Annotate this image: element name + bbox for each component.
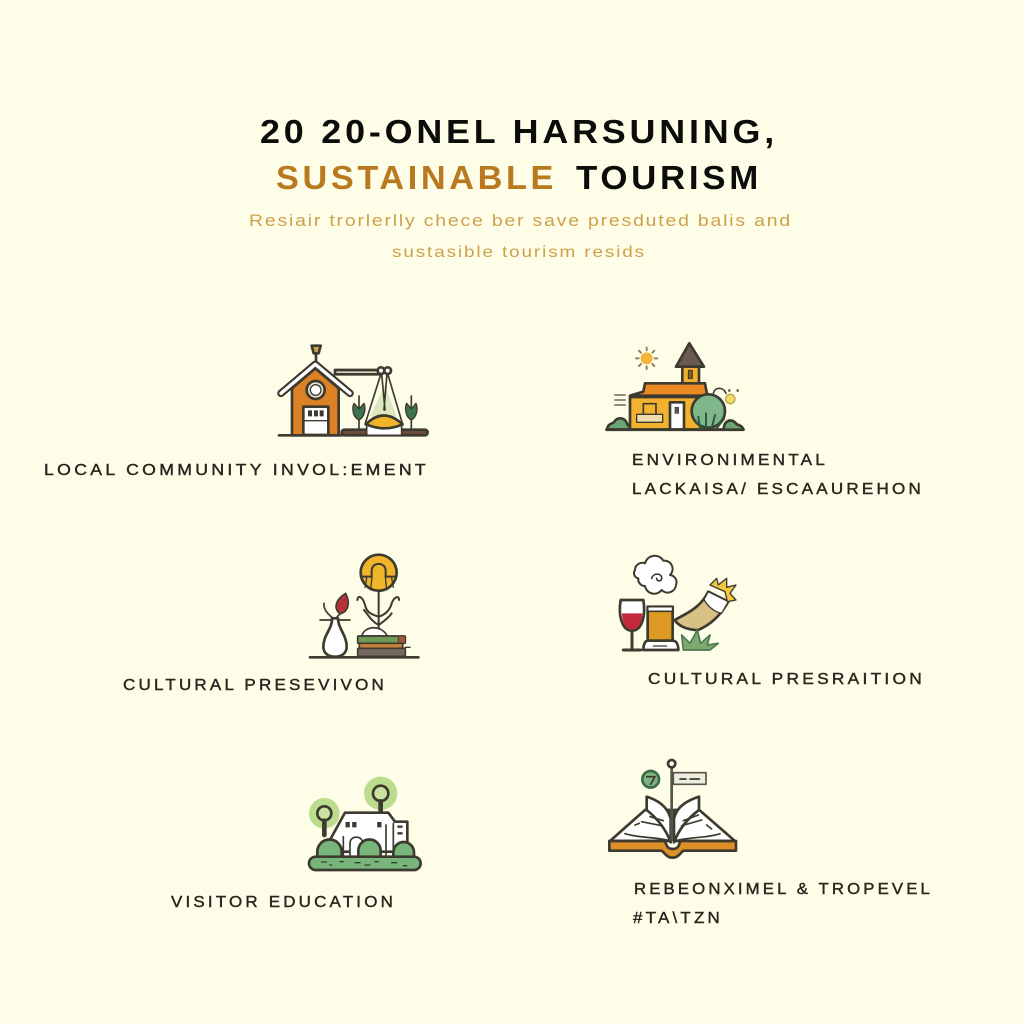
label: local community involvement: LOCAL COMMUNITY INVOL:EMENT <box>44 462 429 479</box>
label: environmental: LACKAISA/ ESCAAUREHON <box>632 481 924 498</box>
label: visitor education: VISITOR EDUCATION <box>171 894 396 911</box>
label: cultural preservation left: CULTURAL PRESEVIVON <box>123 677 387 694</box>
label: environmental: ENVIRONIMENTAL <box>632 452 828 469</box>
icon: wine glass, beer and brush <box>620 556 736 650</box>
title: SUSTAINABLE <box>276 159 557 196</box>
label: environmental <box>632 452 924 498</box>
title <box>260 113 778 196</box>
label: regional and travel: REBEONXIMEL & TROPEVEL <box>634 881 933 898</box>
label: regional and travel: #TA\TZN <box>633 910 723 927</box>
icon: barn with swing and plants <box>279 346 428 435</box>
icon: open book with flag <box>609 760 736 858</box>
title: 20 20-ONEL HARSUNING, <box>260 113 778 150</box>
title: TOURISM <box>576 159 762 196</box>
label: regional and travel <box>633 881 933 927</box>
subtitle: Resiair trorlerlly chece ber save presduted balis and <box>249 211 792 230</box>
icon: yellow house with sun and bush <box>607 343 743 430</box>
subtitle: sustasible tourism resids <box>392 244 646 261</box>
subtitle <box>249 211 792 261</box>
icon: white building with trees <box>309 777 421 870</box>
icon: vase, sun flower and books <box>310 555 418 657</box>
label: cultural preservation right: CULTURAL PRESRAITION <box>648 671 925 688</box>
